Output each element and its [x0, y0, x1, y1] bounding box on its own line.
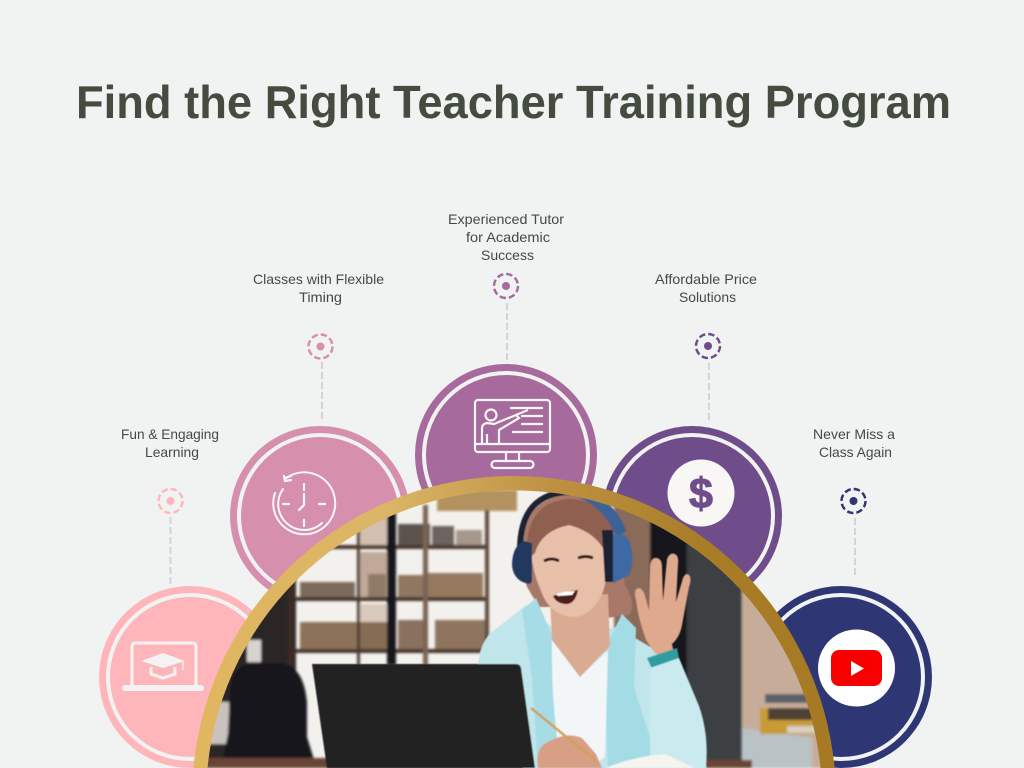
circle: pink: [99, 586, 281, 768]
hoodie: [478, 605, 709, 768]
label: affordable price solutions: [655, 271, 757, 305]
icon: dollar: [668, 460, 734, 526]
label: never miss a class again: Class Again: [819, 444, 892, 460]
circle: purple: [602, 426, 782, 606]
connector: navy: [854, 518, 856, 576]
label: experienced tutor for academic success: Success: [481, 247, 534, 263]
label: experienced tutor for academic success: for Academic: [466, 229, 550, 245]
icon: presentation on monitor: [475, 400, 550, 468]
panel: experienced tutor: [415, 211, 597, 546]
marker: purple dot: [696, 334, 720, 358]
laptop: [312, 664, 535, 768]
table: [204, 758, 604, 768]
label: classes with flexible timing: Timing: [299, 289, 342, 305]
label: classes with flexible timing: [253, 271, 384, 305]
connector: purple: [708, 363, 710, 421]
label: affordable price solutions: Affordable Price: [655, 271, 757, 287]
label: never miss a class again: [813, 426, 895, 460]
chair: [222, 663, 315, 763]
photo frame: gold arc: [193, 476, 835, 768]
shelf objects: [437, 490, 517, 511]
label: fun and engaging learning: Fun & Engaging: [121, 426, 219, 442]
marker: mauve dot: [494, 274, 518, 298]
circle: mauve: [415, 364, 597, 546]
panel: classes with flexible timing: [230, 271, 410, 606]
icon: laptop with graduation cap: [122, 643, 204, 691]
shirt: [552, 640, 608, 768]
circle: rose: [230, 426, 410, 606]
label: affordable price solutions: Solutions: [679, 289, 736, 305]
label: classes with flexible timing: Classes with Flexible: [253, 271, 384, 287]
connector: rose: [321, 362, 323, 421]
label: experienced tutor for academic success: [448, 211, 564, 263]
hair back: [522, 495, 632, 619]
marker: rose dot: [308, 334, 332, 358]
label: fun and engaging learning: [121, 426, 219, 460]
panel: fun and engaging learning: [99, 426, 281, 768]
icon: clock: [273, 472, 335, 534]
neck: [550, 594, 610, 677]
left dark room: [208, 579, 298, 760]
shelf frame: [296, 545, 488, 549]
marker: pink dot: [158, 489, 182, 513]
label: experienced tutor for academic success: Experienced Tutor: [448, 211, 564, 227]
writing hand and pencil: [537, 735, 602, 768]
panel: never miss a class again: [750, 426, 932, 768]
label: never miss a class again: Never Miss a: [813, 426, 895, 442]
right wall: [612, 506, 652, 647]
icon: video play button: [818, 630, 895, 706]
icon: dollar: $: [689, 470, 713, 518]
title: Find the Right Teacher Training Program: [76, 76, 951, 128]
face: [531, 524, 606, 617]
connector: pink: [170, 517, 172, 586]
marker: navy dot: [842, 489, 866, 513]
connector: mauve: [506, 303, 508, 361]
circle: navy: [750, 586, 932, 768]
waving hand: [635, 554, 690, 659]
photo: student waving on a video call: [204, 489, 832, 768]
headphones: [520, 492, 572, 550]
label: fun and engaging learning: Learning: [145, 444, 199, 460]
panel: affordable price solutions: [602, 271, 782, 606]
